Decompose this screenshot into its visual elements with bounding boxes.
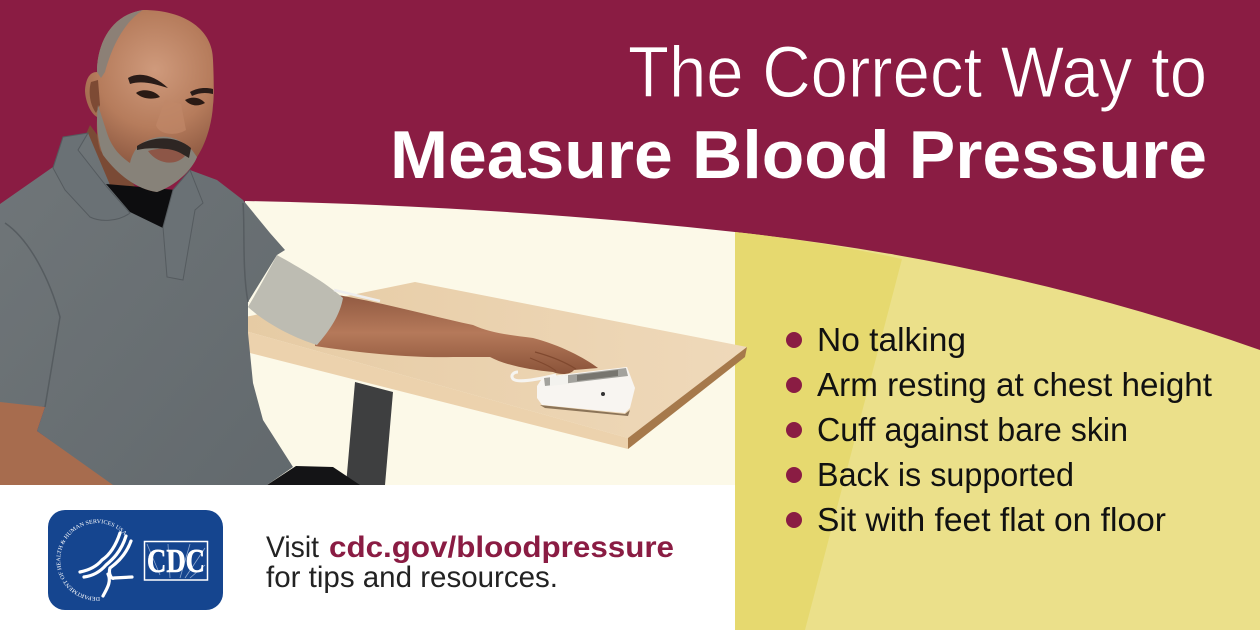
blood pressure monitor	[512, 367, 635, 416]
cuff	[248, 255, 343, 345]
CDC HHS logo	[48, 510, 223, 610]
cuff tube	[334, 290, 380, 301]
panel: yellow checklist background	[735, 232, 1260, 630]
website call to action	[266, 531, 674, 594]
nose	[156, 100, 186, 134]
table leg	[346, 382, 393, 485]
item: cuff against skin: Cuff against bare skin	[817, 411, 1128, 448]
website call to action: Visit	[266, 531, 320, 564]
monitor cord	[512, 372, 556, 381]
HHS eagle	[80, 533, 132, 596]
monitor button	[601, 392, 605, 396]
pants	[267, 466, 360, 485]
website call to action: for tips and resources.	[266, 561, 558, 594]
finger lines	[530, 352, 576, 371]
eyes	[136, 90, 205, 105]
title: Measure Blood Pressure	[390, 117, 1207, 193]
panel: cream photo background	[245, 201, 735, 490]
CDC box: CDC	[147, 543, 205, 580]
item: back supported: Back is supported	[817, 456, 1074, 493]
polo shirt	[0, 133, 293, 485]
panel: white footer	[0, 485, 735, 630]
man with cuff	[0, 10, 598, 485]
hair stubble	[97, 10, 143, 78]
left collar	[53, 133, 130, 220]
website call to action: cdc.gov/bloodpressure	[329, 531, 674, 564]
neck	[78, 125, 145, 200]
logo background	[48, 510, 223, 610]
item: no talking: No talking	[817, 321, 966, 358]
head	[85, 10, 214, 192]
sideburn and beard	[97, 105, 197, 192]
HHS seal ring text: DEPARTMENT OF HEALTH & HUMAN SERVICES USA	[56, 519, 126, 601]
left arm	[0, 400, 113, 485]
item: feet flat: Sit with feet flat on floor	[817, 501, 1166, 538]
table side edge	[628, 347, 747, 449]
title: The Correct Way to	[628, 33, 1207, 113]
eyebrows	[128, 75, 213, 96]
table front edge	[245, 331, 628, 449]
monitor screen	[544, 368, 628, 386]
sleeve seams	[5, 203, 248, 407]
table illustration	[245, 282, 747, 485]
checklist	[786, 321, 1212, 538]
title	[390, 33, 1207, 193]
moustache	[137, 138, 191, 158]
table top	[245, 282, 747, 438]
ear shadow	[90, 80, 100, 113]
monitor body	[537, 367, 635, 413]
monitor shadow	[540, 405, 630, 416]
item: arm resting: Arm resting at chest height	[817, 366, 1212, 403]
lips	[148, 149, 185, 163]
forearm and hand	[315, 292, 598, 374]
right collar and placket	[163, 170, 203, 280]
undershirt	[106, 184, 176, 228]
